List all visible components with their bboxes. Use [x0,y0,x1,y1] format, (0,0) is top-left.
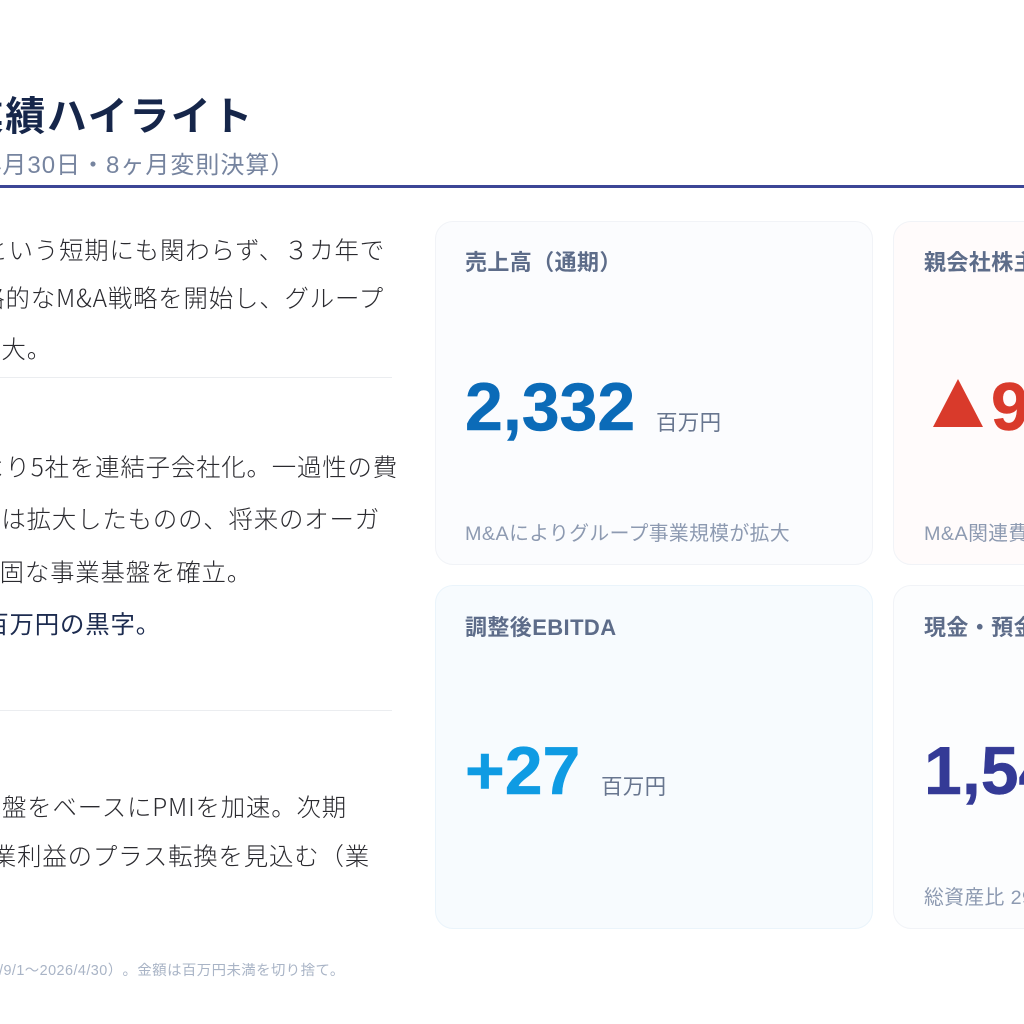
text block: results [0,449,398,641]
card: net income [893,221,1024,565]
card note: M&Aによりグループ事業規模が拡大 [465,523,790,545]
card value: +27 [465,733,580,809]
card: cash [893,585,1024,929]
card label: 売上高（通期） [465,250,622,275]
text block: overview [0,232,385,366]
text block: outlook [0,789,370,873]
card: revenue [435,221,873,565]
footnote: /9/1～2026/4/30）。金額は百万円未満を切り捨て。 [0,963,345,979]
card label: 調整後EBITDA [465,615,616,640]
card value: 2,332 [465,369,635,445]
header rule [0,185,1024,188]
card: adjusted EBITDA [435,585,873,929]
card unit: 百万円 [601,775,666,799]
card unit: 百万円 [656,411,721,435]
icon: negative triangle [933,379,983,427]
